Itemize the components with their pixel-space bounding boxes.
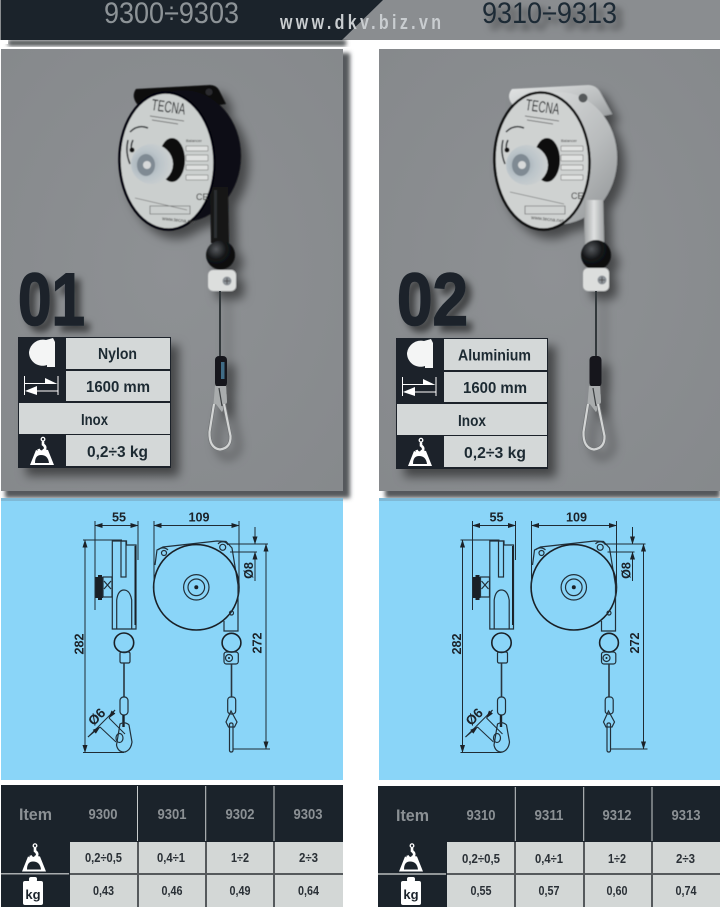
row: weight: 0,57 [538,884,560,898]
dimension: width 55 [95,510,138,610]
value: cable material: Inox [458,413,486,430]
header row: Item [396,806,429,825]
row: weight: 0,74 [676,884,697,898]
dimension: carabiner opening 6 [463,705,502,742]
row: load: 0,2÷0,5 [462,852,500,866]
dimension: diameter 109: 109 [188,510,210,524]
product photo: silver balancer: TECNA [524,97,561,119]
product number 02: 02 [397,258,468,341]
row: load: 2÷3 [299,851,318,865]
panel: product 02 [379,49,720,498]
dimension: hole diameter 8 [608,527,634,581]
header row: 9312 [602,807,632,824]
side view [95,541,136,752]
value: cable material: Inox [81,412,108,429]
dimension: width 55 [472,510,516,610]
value: cable length: 1600 mm [86,379,150,396]
watermark: www.dkv.biz.vn [279,11,444,33]
value: casing material: Nylon [98,346,137,363]
dimension: carabiner opening 6 [85,705,125,742]
table: 9300 series [1,785,343,907]
dimension: height 282 [450,540,502,752]
header row: 9311 [534,807,564,824]
value: load range: 0,2÷3 kg [87,444,148,461]
row: load [462,852,695,866]
product photo: silver balancer: Balancer [561,138,577,143]
front view [154,541,241,752]
cable and carabiner [583,291,605,450]
icon: load hook [30,437,54,465]
row: weight: 0,55 [470,884,492,898]
row: weight [93,884,319,898]
header row [19,805,322,824]
dimension: height 272 [228,544,270,749]
row: weight: 0,49 [230,884,251,898]
row: weight: 0,64 [298,884,319,898]
header row: 9302 [226,806,254,823]
product photo: silver balancer [492,85,617,450]
icon: weight kg: kg [25,887,41,902]
dimension: hole diameter 8: Ø8 [620,562,634,579]
technical drawing: side and front views [450,510,648,752]
table: 9310 series [378,786,720,907]
row: load: 0,4÷1 [535,852,563,866]
spec table 02 [396,338,548,469]
icon: cable length [402,377,436,396]
panel: dimension drawing 01 [1,498,343,780]
front view [531,541,618,752]
dimension: height 282: 282 [450,633,464,655]
header band [0,0,720,46]
header row: 9303 [294,806,322,823]
spec table 01 [18,337,171,468]
dimension: hole diameter 8 [230,527,257,581]
dimension: carabiner opening 6: Ø6 [85,705,109,728]
dimension: height 272: 272 [250,632,264,654]
row: load [85,851,318,865]
value: casing material: Aluminium [458,348,531,364]
dimension: width 55: 55 [489,510,504,524]
product photo: black balancer: CE [196,192,209,202]
row: weight [470,884,697,898]
row: load: 1÷2 [231,851,249,865]
icon: load hook [399,844,423,872]
dimension: diameter 109 [154,510,239,590]
header row [396,806,700,825]
product photo: black balancer: TECNA [150,97,187,119]
header row: 9313 [672,807,700,824]
side view [472,541,514,752]
row: load: 0,4÷1 [157,851,185,865]
product photo: black balancer [117,85,241,450]
row: load: 1÷2 [608,852,626,866]
dimension: height 272 [606,544,648,749]
value: cable length: 1600 mm [463,380,527,397]
header row: 9300 [88,806,118,823]
icon: cable length [24,376,58,395]
dimension: diameter 109 [532,510,616,590]
dimension: carabiner opening 6: Ø6 [463,705,486,728]
product photo: black balancer: Balancer [186,138,202,143]
value: load range: 0,2÷3 kg [464,445,526,462]
row: weight: 0,46 [162,884,183,898]
dimension: width 55: 55 [112,510,126,524]
icon: weight kg [23,877,43,905]
row: load: 2÷3 [676,852,695,866]
dimension: height 272: 272 [628,632,642,654]
cable and carabiner [209,291,231,450]
panel: dimension drawing 02 [379,498,720,780]
dimension: height 282: 282 [72,633,86,655]
icon: casing [407,339,433,368]
icon: load hook [22,844,46,872]
icon: weight kg: kg [403,887,419,902]
product photo: silver balancer: CE [571,191,584,201]
header row: Item [19,805,52,824]
dimension: height 282 [72,540,124,752]
icon: weight kg [401,877,421,905]
icon: casing [29,338,55,367]
product photo: black balancer: www.tecna.net [162,216,195,225]
dimension: hole diameter 8: Ø8 [242,562,256,579]
icon: load hook [408,438,432,466]
header row: 9310 [466,807,496,824]
header row: 9301 [158,806,186,823]
row: weight: 0,43 [93,884,114,898]
technical drawing: side and front views [72,510,270,752]
product photo: silver balancer: www.tecna.net [531,215,564,224]
dimension: diameter 109: 109 [566,510,587,524]
panel: product 01 [1,49,350,498]
product number 01: 01 [18,258,85,341]
row: load: 0,2÷0,5 [85,851,122,865]
row: weight: 0,60 [606,884,628,898]
